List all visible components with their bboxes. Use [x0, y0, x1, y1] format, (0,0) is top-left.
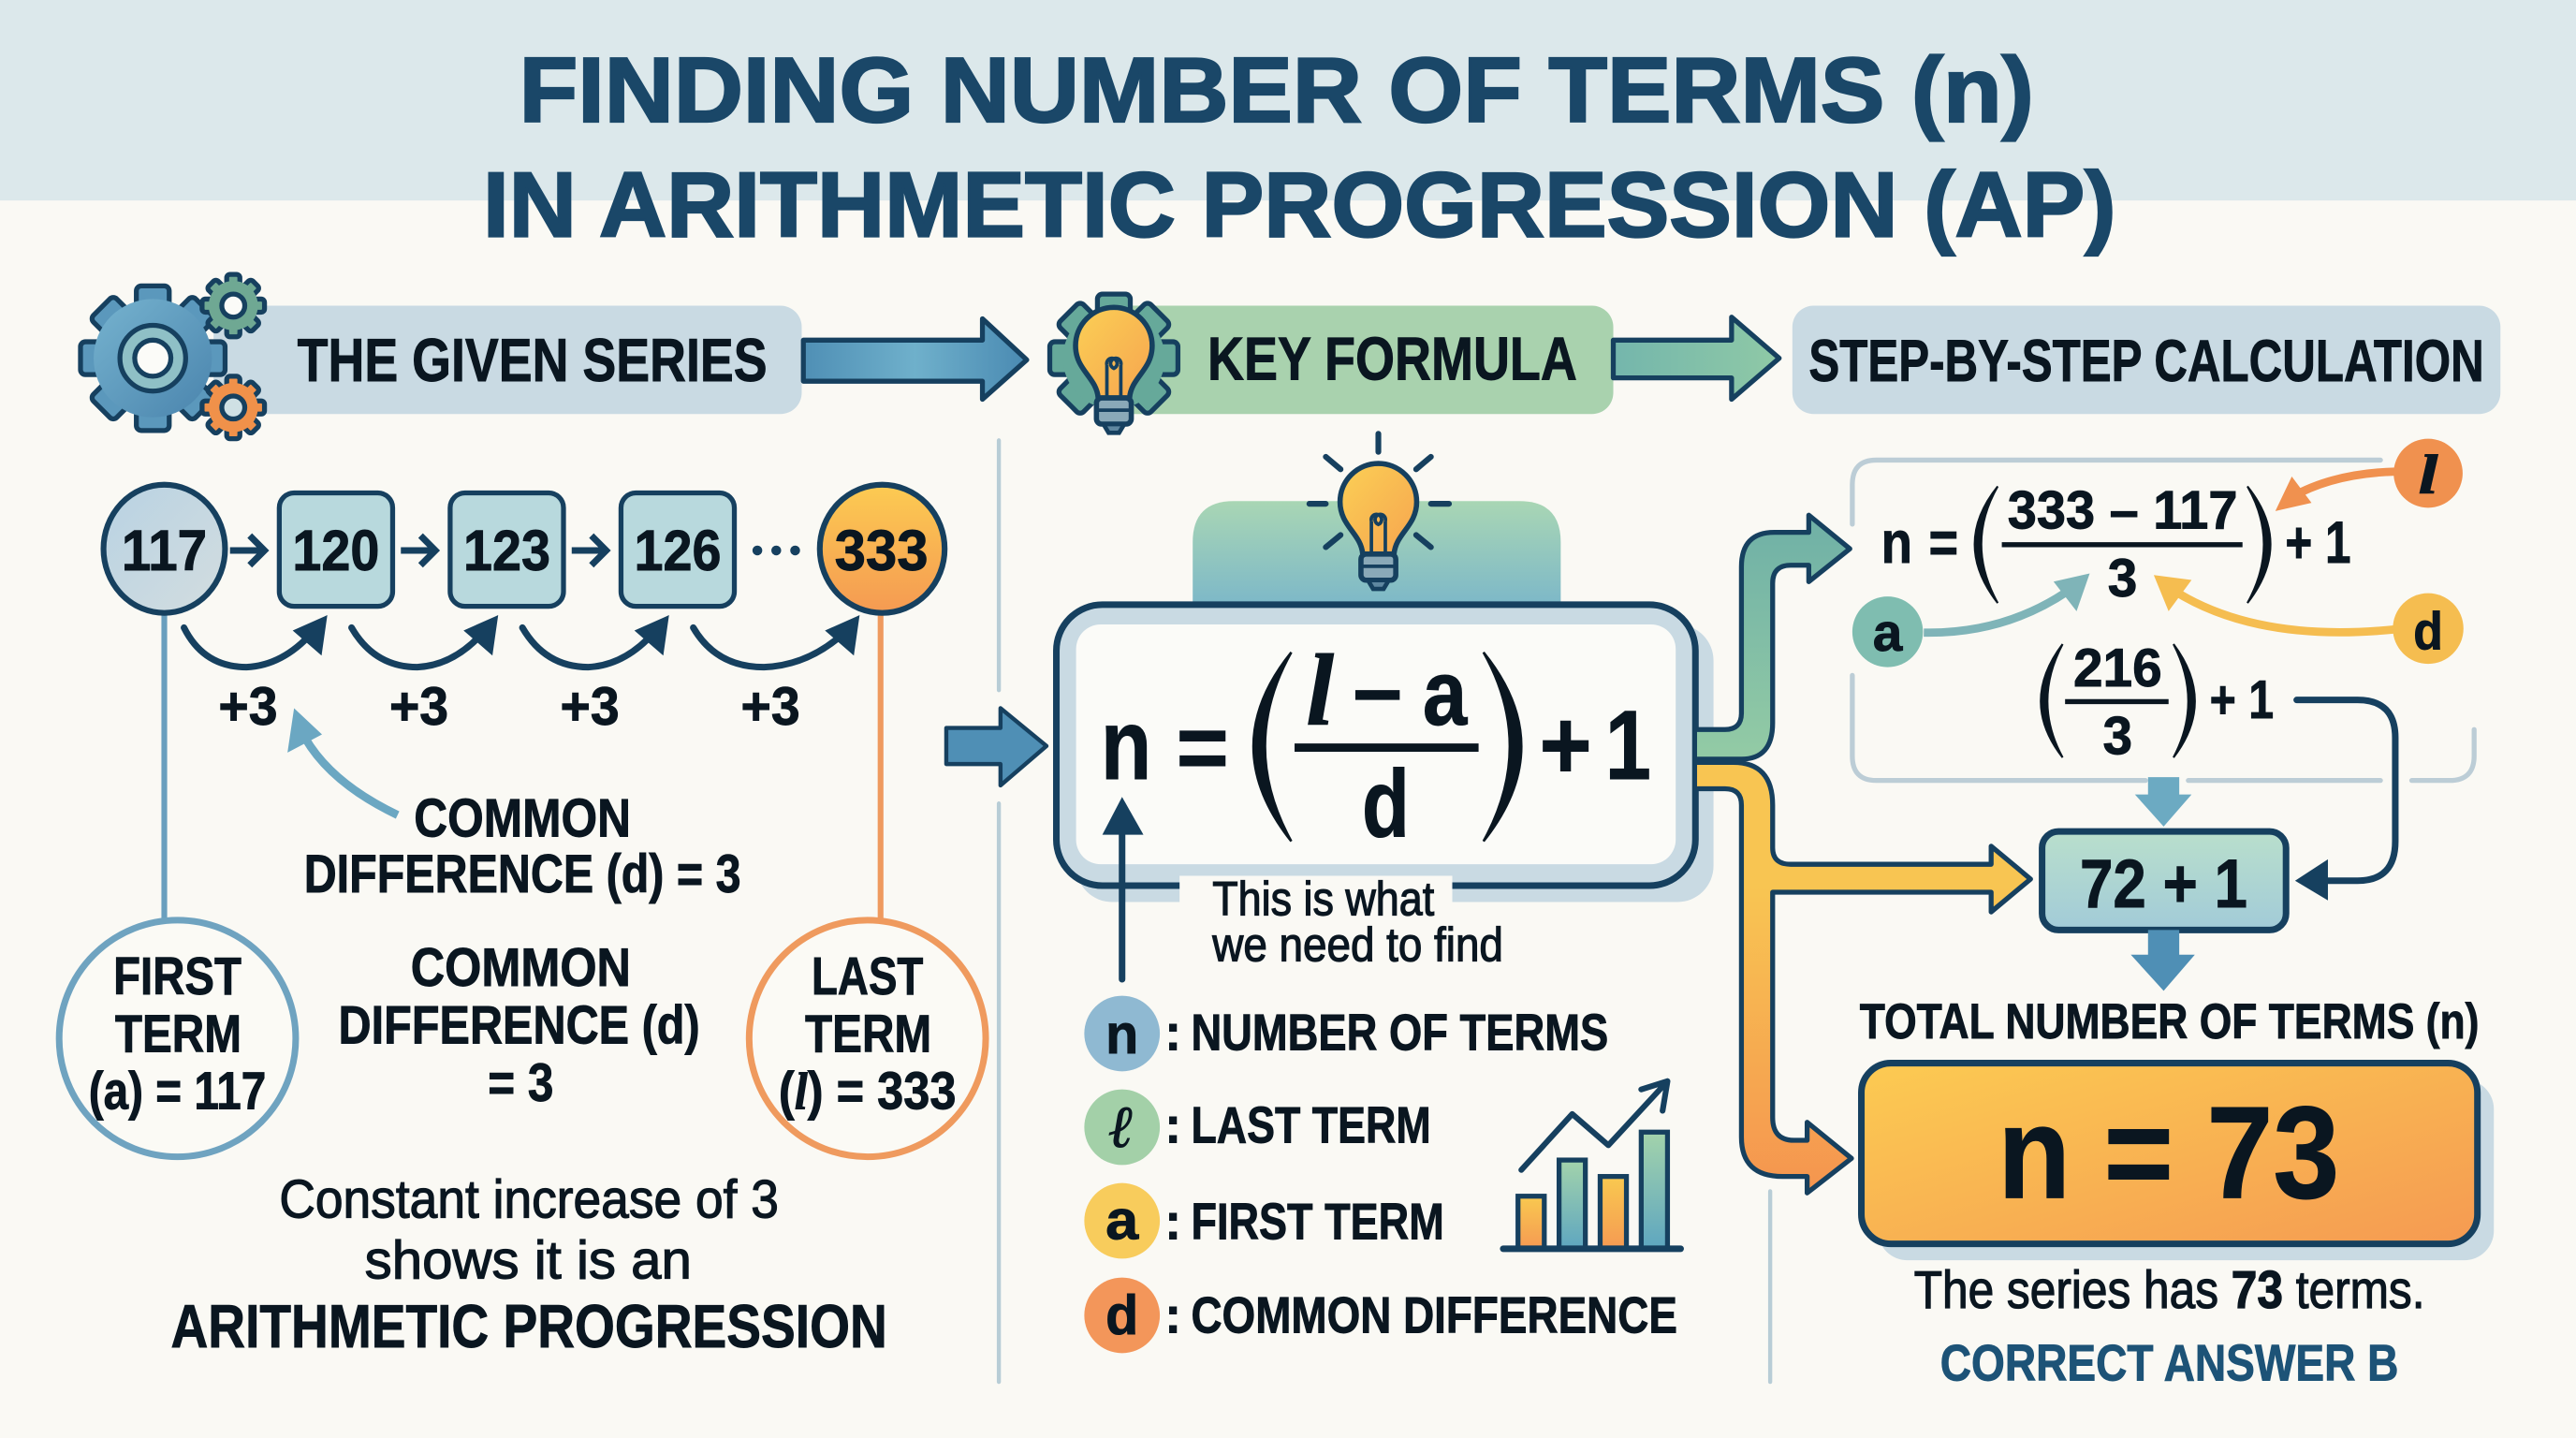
text: conclusion: ARITHMETIC PROGRESSION	[171, 1292, 887, 1360]
substitution formula: 333 – 117	[2008, 480, 2237, 540]
legend item: l	[1084, 1090, 1431, 1165]
badge: last term: (l) = 333	[779, 1062, 956, 1122]
result box: n = 73	[1998, 1078, 2339, 1225]
series node 333	[820, 485, 944, 613]
series node 123: 123	[463, 519, 550, 583]
badge: first term	[59, 920, 296, 1157]
ellipsis dots	[753, 546, 800, 555]
formula box: =	[1177, 696, 1229, 799]
legend item: a: :	[1164, 1193, 1181, 1250]
+3 labels: +3	[389, 677, 448, 737]
+3 labels: +3	[741, 677, 800, 737]
series node 333: 333	[835, 519, 929, 583]
series arrow	[401, 536, 435, 565]
title	[483, 38, 2116, 257]
arrow: formula to calculation	[1614, 317, 1779, 399]
arrow: l badge to numerator	[2276, 472, 2395, 511]
legend item: a	[1084, 1183, 1444, 1258]
box: 72 + 1	[2042, 831, 2286, 930]
series node 126: 126	[634, 519, 721, 583]
text: this is what we need to find	[1211, 873, 1503, 972]
arrow: a badge to formula	[1924, 574, 2089, 633]
connector: simplified to 72 + 1	[2295, 700, 2395, 901]
badge: last term: LAST	[812, 946, 923, 1005]
+3 labels	[218, 677, 800, 737]
text: common difference value	[339, 938, 700, 1113]
text: conclusion: shows it is an	[365, 1230, 692, 1290]
substitution formula	[1881, 480, 2351, 609]
series node 117	[104, 485, 225, 613]
formula box: a	[1423, 641, 1468, 744]
legend item: n	[1084, 996, 1608, 1071]
legend item: n: NUMBER OF TERMS	[1191, 1005, 1608, 1062]
legend item: n: n	[1105, 1003, 1138, 1065]
badge: l: l	[2419, 444, 2438, 506]
series node 126	[621, 493, 735, 607]
connector: last term line	[879, 611, 882, 920]
badge: first term: (a) = 117	[89, 1062, 266, 1121]
divider right	[1769, 1191, 1771, 1382]
legend item: d: COMMON DIFFERENCE	[1191, 1286, 1677, 1343]
simplified fraction: 216	[2073, 638, 2162, 698]
series node 120	[279, 493, 392, 607]
arrow: common difference pointer	[287, 708, 398, 815]
result box	[1862, 1064, 2494, 1260]
text: series has 73 terms: The series has 73 terms.	[1914, 1260, 2425, 1319]
tube arrow: formula to simplification and result	[1697, 762, 2030, 1193]
series node 117: 117	[122, 519, 207, 583]
panel heading: step-by-step calculation	[1793, 305, 2500, 414]
series node 123	[450, 493, 564, 607]
panel heading: key formula: KEY FORMULA	[1208, 324, 1577, 392]
icon: gears	[80, 274, 265, 439]
legend item: l: LAST TERM	[1191, 1097, 1431, 1154]
callout: common difference: COMMON	[414, 788, 631, 848]
legend	[1084, 996, 1677, 1353]
icon: gear with light bulb	[1050, 294, 1178, 433]
substitution formula: 3	[2108, 549, 2137, 609]
callout: common difference: DIFFERENCE (d) = 3	[304, 844, 741, 904]
icon: bar chart with rising arrow	[1503, 1081, 1680, 1249]
panel tab behind formula	[1193, 501, 1560, 605]
box: 72 + 1: 72 + 1	[2080, 844, 2247, 922]
formula box: 1	[1605, 691, 1651, 800]
legend item: d	[1084, 1278, 1677, 1353]
panel heading: key formula	[1101, 305, 1614, 414]
badge: last term	[749, 920, 986, 1157]
series arrow	[230, 536, 265, 565]
substitution formula: + 1	[2285, 510, 2351, 576]
simplified fraction: 3	[2103, 707, 2132, 767]
substitution formula: n	[1881, 510, 1912, 576]
legend item: d: d	[1105, 1284, 1138, 1346]
+3 labels: +3	[560, 677, 620, 737]
formula box	[1057, 605, 1714, 916]
panel heading: the given series: THE GIVEN SERIES	[298, 326, 768, 394]
arrow: down to 72 + 1	[2135, 777, 2191, 827]
divider left	[998, 440, 1000, 1382]
badge: a: a	[1873, 603, 1903, 662]
series arrow	[572, 536, 607, 565]
badge: a	[1852, 596, 1923, 668]
calculation bracket frame	[1852, 460, 2474, 781]
legend item: a: a	[1105, 1188, 1139, 1251]
arrow: down to result	[2130, 930, 2195, 990]
substitution formula: =	[1928, 510, 1958, 576]
heading: total number of terms: TOTAL NUMBER OF TERMS (n)	[1860, 994, 2479, 1049]
formula box: d	[1362, 750, 1410, 857]
arrow: d badge to denominator	[2154, 575, 2395, 632]
legend item: l: ℓ	[1109, 1094, 1134, 1160]
title: FINDING NUMBER OF TERMS (n)	[520, 38, 2034, 141]
badge: last term: TERM	[805, 1004, 931, 1063]
text: this is what we need to find: This is what	[1212, 873, 1434, 926]
badge: l	[2393, 439, 2463, 507]
text: correct answer: CORRECT ANSWER B	[1940, 1334, 2398, 1391]
formula box: l	[1306, 634, 1335, 747]
badge: first term: TERM	[115, 1004, 242, 1063]
simplified fraction	[2041, 638, 2274, 767]
connector: first term line	[163, 611, 166, 920]
text: common difference value: DIFFERENCE (d)	[339, 995, 700, 1055]
text: this is what we need to find: we need to find	[1211, 918, 1503, 972]
formula box: +	[1540, 691, 1592, 800]
text: conclusion: Constant increase of 3	[279, 1170, 779, 1230]
arrow: pointer to n	[1103, 797, 1144, 979]
title: IN ARITHMETIC PROGRESSION (AP)	[483, 154, 2116, 257]
icon: light bulb with rays	[1310, 433, 1449, 589]
text: common difference value: COMMON	[411, 938, 631, 998]
badge: d: d	[2413, 601, 2443, 660]
header band	[0, 0, 2576, 200]
legend item: n: :	[1164, 1005, 1181, 1062]
text: common difference value: = 3	[488, 1053, 553, 1113]
text: conclusion	[171, 1170, 887, 1360]
badge: first term: FIRST	[113, 946, 242, 1005]
badge: d	[2393, 594, 2464, 664]
series node 120: 120	[292, 519, 379, 583]
tube arrow: formula to substitution	[1697, 515, 1850, 759]
arrow into formula	[946, 708, 1046, 785]
formula box: n	[1101, 688, 1151, 800]
simplified fraction: + 1	[2210, 670, 2274, 730]
legend item: a: FIRST TERM	[1191, 1193, 1444, 1250]
legend item: d: :	[1164, 1286, 1181, 1343]
callout: common difference	[304, 788, 741, 904]
panel heading: the given series	[213, 305, 801, 414]
curved +3 arrows	[184, 618, 857, 668]
legend item: l: :	[1164, 1097, 1181, 1154]
+3 labels: +3	[218, 677, 278, 737]
arrow: series to formula	[803, 318, 1027, 399]
